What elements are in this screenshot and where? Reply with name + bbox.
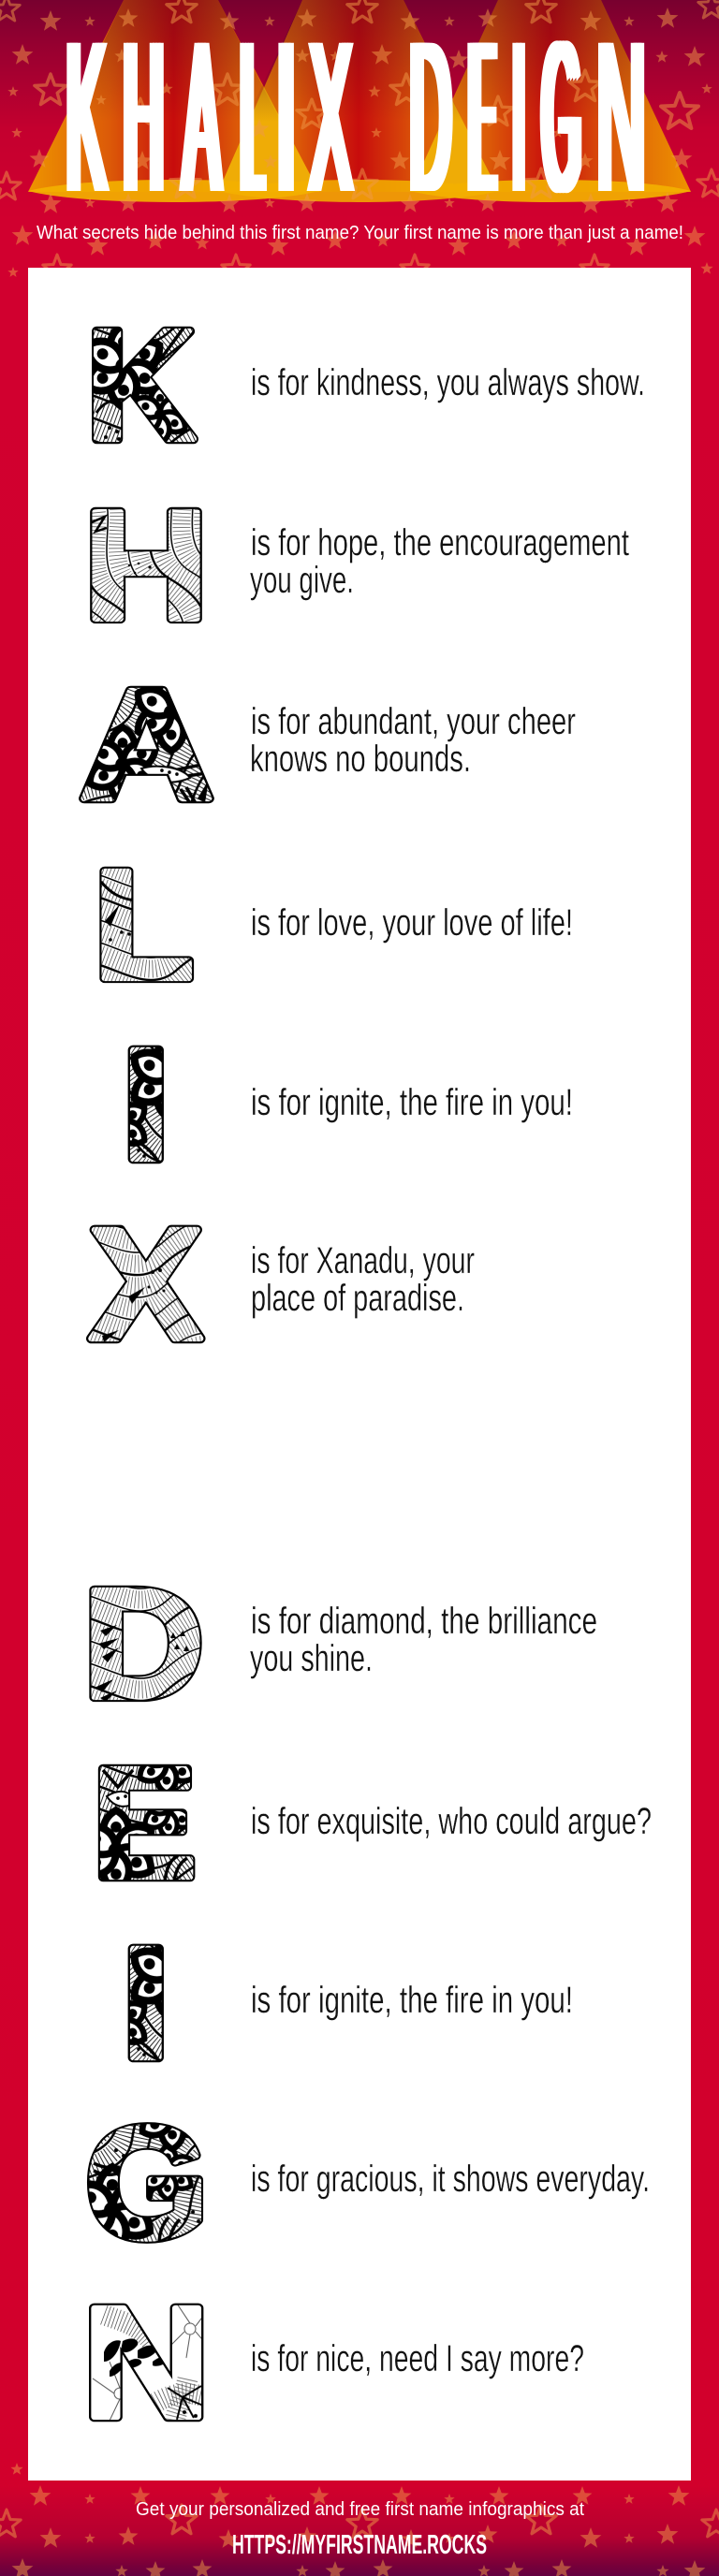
- title: D: [405, 0, 448, 237]
- row: H: [84, 478, 629, 652]
- decorative stars: top band: [0, 0, 719, 282]
- text: H lines: [250, 522, 629, 601]
- icon: patterned letter G: G: [85, 2095, 208, 2271]
- footer: call to action: Get your personalized and free first name infographics at: [136, 2499, 584, 2520]
- icon: patterned letter E: E: [93, 1735, 197, 1910]
- icon: patterned letter X: X: [90, 1195, 202, 1372]
- icon: patterned letter D: D: [83, 1558, 204, 1731]
- icon: patterned letter K: K: [86, 298, 195, 473]
- subtitle: What secrets hide behind this first name? Your first name is more than just a name!: [37, 223, 683, 243]
- text: X lines: place of paradise.: [251, 1278, 464, 1319]
- icon: patterned letter I: I: [122, 1914, 170, 2091]
- icon: patterned letter A: A: [80, 656, 213, 832]
- icon: patterned letter X: X: [90, 1195, 202, 1372]
- text: D lines: you shine.: [250, 1638, 373, 1679]
- row: E: [93, 1735, 652, 1910]
- icon: patterned letter G: G: [85, 2095, 208, 2271]
- row: A: [80, 656, 576, 832]
- row: X: [90, 1195, 475, 1372]
- icon: patterned letter L: L: [94, 839, 194, 1012]
- text: A lines: is for abundant, your cheer: [251, 701, 576, 742]
- decorative stars: bottom band: [0, 2463, 719, 2576]
- text: X lines: is for Xanadu, your: [251, 1240, 475, 1281]
- text: second I line: is for ignite, the fire in you!: [251, 1980, 573, 2021]
- row: G: [85, 2095, 650, 2271]
- icon: patterned letter H: H: [84, 478, 208, 652]
- panel: white letter list: [28, 268, 691, 2481]
- text: D lines: is for diamond, the brilliance: [251, 1601, 597, 1642]
- text: D lines: [250, 1601, 597, 1679]
- text: X lines: [251, 1240, 475, 1319]
- text: N line: is for nice, need I say more?: [251, 2338, 584, 2379]
- icon: patterned letter I: I: [122, 1016, 170, 1193]
- title: N: [593, 0, 642, 237]
- title: H: [119, 0, 159, 237]
- title: E: [464, 0, 490, 237]
- icon: patterned letter N: N: [82, 2274, 210, 2451]
- icon: patterned letter D: D: [83, 1558, 204, 1731]
- text: L line: is for love, your love of life!: [251, 902, 573, 944]
- footer: url: HTTPS://MYFIRSTNAME.ROCKS: [232, 2530, 487, 2560]
- spotlights with yellow pools: [28, 0, 691, 202]
- text: A lines: knows no bounds.: [250, 739, 471, 780]
- title: I: [272, 0, 290, 237]
- title: I: [506, 0, 524, 237]
- text: I line: is for ignite, the fire in you!: [251, 1082, 573, 1123]
- title: G: [537, 0, 577, 237]
- icon: patterned letter N: N: [82, 2274, 210, 2451]
- title: L: [237, 0, 257, 237]
- icon: patterned letter L: L: [94, 839, 194, 1012]
- icon: patterned letter K: K: [86, 298, 195, 473]
- row: L: [94, 839, 573, 1012]
- text: H lines: you give.: [250, 560, 354, 601]
- title: K: [62, 0, 102, 237]
- icon: patterned letter A: A: [80, 656, 213, 832]
- row: I second: [122, 1914, 573, 2091]
- title: X: [305, 0, 348, 237]
- row: N: [82, 2274, 584, 2451]
- text: A lines: [250, 701, 576, 780]
- title: [62, 0, 644, 237]
- icon: patterned letter H: H: [84, 478, 208, 652]
- row: I: [122, 1016, 573, 1193]
- icon: patterned letter E: E: [93, 1735, 197, 1910]
- icon: patterned letter I: I: [122, 1016, 170, 1193]
- title: A: [179, 0, 215, 237]
- row: K: [86, 298, 645, 473]
- row: D: [83, 1558, 597, 1731]
- icon: patterned letter I: I: [122, 1914, 170, 2091]
